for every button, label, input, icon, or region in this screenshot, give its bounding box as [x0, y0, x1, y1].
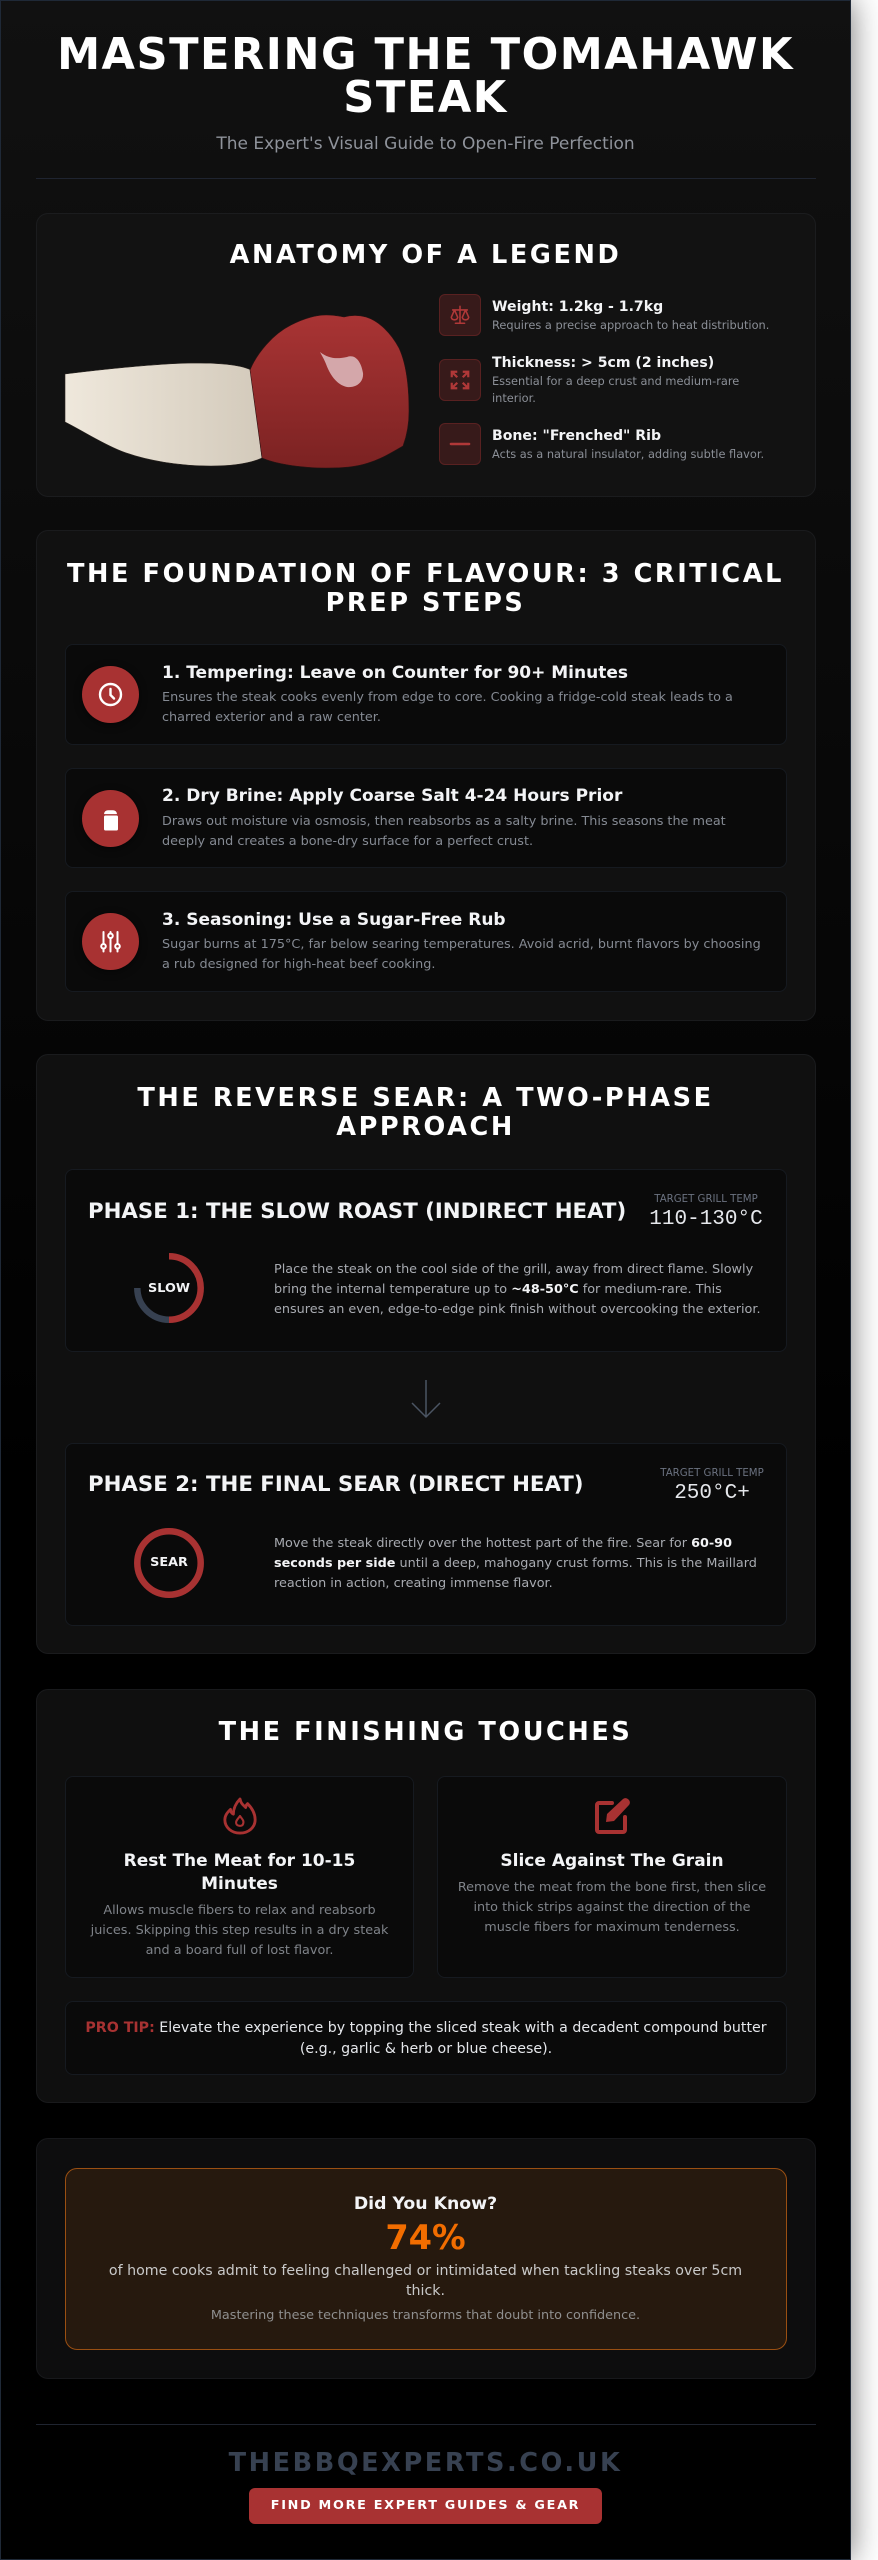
button: find more: FIND MORE EXPERT GUIDES & GEAR — [271, 2498, 580, 2513]
callout text — [109, 2263, 742, 2299]
statistic: 74%: 74% — [385, 2218, 466, 2257]
slice title: Slice Against The Grain — [500, 1851, 724, 1871]
phase 1 title: PHASE 1: THE SLOW ROAST (INDIRECT HEAT) — [88, 1199, 626, 1224]
subtitle: The Expert's Visual Guide to Open-Fire Perfection — [216, 134, 635, 154]
title — [57, 30, 794, 123]
card: rest the meat — [65, 1776, 414, 1978]
pro tip text — [85, 2020, 767, 2057]
heading: foundation: THE FOUNDATION OF FLAVOUR: 3 CRITICAL — [67, 559, 784, 589]
callout text: of home cooks admit to feeling challenged or intimidated when tackling steaks over 5cm — [109, 2263, 742, 2279]
spec text: thickness: Essential for a deep crust and medium-rare — [492, 374, 739, 388]
phase 2 title: PHASE 2: THE FINAL SEAR (DIRECT HEAT) — [88, 1472, 584, 1497]
icon: sliders — [82, 913, 139, 970]
rest text: juices. Skipping this step results in a dry steak — [91, 1923, 388, 1938]
phase 1 text: ensures an even, edge-to-edge pink finish without overcooking the exterior. — [274, 1302, 761, 1317]
step 2 title: 2. Dry Brine: Apply Coarse Salt 4-24 Hours Prior — [162, 786, 622, 806]
rest text: and a board full of lost flavor. — [146, 1943, 333, 1958]
rest title — [124, 1851, 355, 1894]
rest title: Rest The Meat for 10-15 — [124, 1851, 355, 1871]
phase 1 target label: TARGET GRILL TEMP — [654, 1194, 758, 1205]
title: STEAK — [343, 73, 508, 123]
heading: reverse sear: THE REVERSE SEAR: A TWO-PHASE — [137, 1083, 714, 1113]
spec icon: scales — [439, 294, 481, 336]
illustration: tomahawk steak — [64, 314, 410, 468]
meat — [250, 315, 409, 468]
phase 2 text: seconds per side until a deep, mahogany crust forms. This is the Maillard — [274, 1556, 757, 1571]
heading: finishing touches: THE FINISHING TOUCHES — [219, 1717, 632, 1747]
panel: anatomy of a legend — [36, 213, 816, 497]
rest text — [90, 1903, 388, 1958]
card: step 2 — [65, 768, 787, 868]
phase 1 target value: 110-130°C — [649, 1208, 763, 1231]
step 1 text — [162, 690, 733, 725]
icon: clock — [82, 666, 139, 723]
spec title: bone: Bone: "Frenched" Rib — [492, 428, 661, 444]
phase 1 text: Place the steak on the cool side of the grill, away from direct flame. Slowly — [274, 1262, 753, 1277]
card: slice against the grain — [437, 1776, 787, 1978]
icon: flame — [223, 1798, 257, 1834]
callout text: thick. — [406, 2283, 445, 2299]
spec icon: expand — [439, 359, 481, 401]
step 1 text: Ensures the steak cooks evenly from edge to core. Cooking a fridge-cold steak leads to a — [162, 690, 733, 705]
step 3 text: a rub designed for high-heat beef cooking. — [162, 957, 435, 972]
heading: reverse sear: APPROACH — [336, 1112, 515, 1142]
spec title: thickness: Thickness: > 5cm (2 inches) — [492, 355, 714, 371]
pro tip text: PRO TIP: Elevate the experience by topping the sliced steak with a decadent compound butter — [85, 2020, 767, 2036]
card: phase 2 — [65, 1443, 787, 1626]
heading: foundation: PREP STEPS — [326, 588, 525, 618]
card: step 3 — [65, 891, 787, 992]
spec icon: bone — [439, 423, 481, 465]
title: MASTERING THE TOMAHAWK — [57, 30, 794, 80]
slice text: muscle fibers for maximum tenderness. — [484, 1920, 740, 1935]
panel: finishing touches — [36, 1689, 816, 2103]
slice text: into thick strips against the direction of the — [474, 1900, 750, 1915]
phase 2 text: reaction in action, creating immense flavor. — [274, 1576, 553, 1591]
panel: reverse sear — [36, 1054, 816, 1654]
spec text: bone: Acts as a natural insulator, adding subtle flavor. — [492, 447, 764, 461]
rest text: Allows muscle fibers to relax and reabsorb — [103, 1903, 376, 1918]
step 1 title: 1. Tempering: Leave on Counter for 90+ Minutes — [162, 663, 628, 683]
callout note: Mastering these techniques transforms that doubt into confidence. — [211, 2308, 640, 2323]
slice text — [458, 1880, 766, 1935]
spec title: weight: Weight: 1.2kg - 1.7kg — [492, 299, 663, 315]
spec text: weight: Requires a precise approach to heat distribution. — [492, 318, 769, 332]
rest title: Minutes — [201, 1874, 278, 1894]
heading: anatomy: ANATOMY OF A LEGEND — [230, 240, 621, 270]
phase 2 target value: 250°C+ — [674, 1482, 750, 1505]
panel: statistic — [36, 2138, 816, 2379]
spec text: thickness: interior. — [492, 391, 536, 405]
gauge: sear — [134, 1528, 204, 1598]
step 2 text — [162, 814, 726, 849]
step 1 text: charred exterior and a raw center. — [162, 710, 381, 725]
phase 1 text: bring the internal temperature up to ~48-50°C for medium-rare. This — [274, 1282, 722, 1297]
card: pro tip — [65, 2001, 787, 2075]
slice text: Remove the meat from the bone first, then slice — [458, 1880, 766, 1895]
gauge: slow — [134, 1253, 204, 1323]
card: phase 1 — [65, 1169, 787, 1352]
phase 2 text — [274, 1536, 757, 1591]
heading: reverse sear — [137, 1083, 714, 1142]
button: find more — [249, 2488, 602, 2524]
callout heading: Did You Know? — [354, 2194, 497, 2214]
icon: pencil square — [595, 1798, 630, 1834]
step 2 text: Draws out moisture via osmosis, then reabsorbs as a salty brine. This seasons the meat — [162, 814, 726, 829]
icon: salt shaker — [82, 790, 139, 847]
arrow: phase 1 to phase 2 — [412, 1380, 440, 1418]
heading: foundation — [67, 559, 784, 618]
step 3 title: 3. Seasoning: Use a Sugar-Free Rub — [162, 910, 506, 930]
gauge label: slow: SLOW — [148, 1281, 190, 1296]
bone — [65, 363, 262, 466]
card: step 1 — [65, 644, 787, 745]
step 2 text: deeply and creates a bone-dry surface for a perfect crust. — [162, 834, 533, 849]
fat highlight — [320, 352, 363, 387]
brand name: THEBBQEXPERTS.CO.UK — [229, 2448, 622, 2478]
pro tip text: (e.g., garlic & herb or blue cheese). — [300, 2041, 552, 2057]
step 3 text — [162, 937, 761, 972]
panel: foundation of flavour — [36, 530, 816, 1021]
spec text: thickness — [492, 374, 739, 405]
phase 2 text: Move the steak directly over the hottest part of the fire. Sear for 60-90 — [274, 1536, 732, 1551]
gauge label: sear: SEAR — [150, 1555, 188, 1570]
callout: did you know — [65, 2168, 787, 2350]
phase 1 text — [274, 1262, 761, 1317]
phase 2 target label: TARGET GRILL TEMP — [660, 1468, 764, 1479]
step 3 text: Sugar burns at 175°C, far below searing temperatures. Avoid acrid, burnt flavors by choosing — [162, 937, 761, 952]
